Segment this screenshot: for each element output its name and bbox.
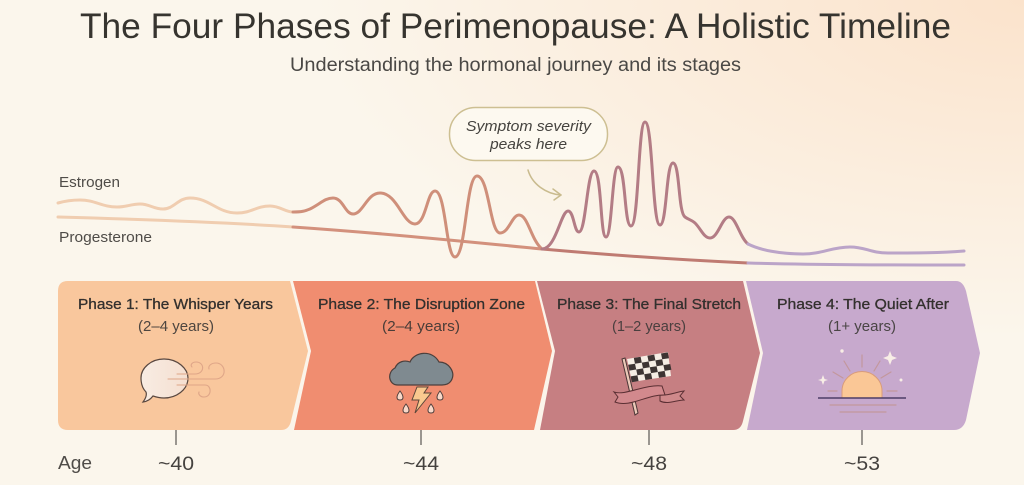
icon: speech bubble with wind [141,359,224,402]
callout: peaks here [489,137,567,153]
panel: phase 4 [700,281,980,430]
label: Estrogen: Estrogen [59,175,120,191]
duration: phase 2: (2–4 years) [382,319,460,335]
duration: phase 1: (2–4 years) [138,319,214,335]
age marker: 40 [158,430,194,475]
estrogen line [58,122,964,257]
icon: sunrise [818,349,906,412]
icon: checkered flag [614,352,684,415]
age marker: 40: ~40 [158,453,194,475]
label: Progesterone: Progesterone [59,230,152,246]
panel: phase 1 [58,281,311,430]
heading: phase 1: Phase 1: The Whisper Years [78,296,273,313]
age axis [58,430,880,475]
duration: phase 3: (1–2 years) [612,319,686,335]
title: The Four Phases of Perimenopause: A Holistic Timeline [80,6,951,46]
age marker: 53: ~53 [844,453,880,475]
age marker: 44: ~44 [403,453,439,475]
panel: phase 3 [520,281,763,430]
heading: phase 3: Phase 3: The Final Stretch [557,296,741,313]
age marker: 48: ~48 [631,453,667,475]
label: Age: Age [58,452,92,473]
age marker: 48 [631,430,667,475]
age marker: 44 [403,430,439,475]
duration: phase 4: (1+ years) [828,319,896,335]
icon: storm cloud [390,353,453,413]
heading: phase 2: Phase 2: The Disruption Zone [318,296,525,313]
arrow: callout to peak [528,170,561,200]
panel: phase 2 [280,281,555,430]
progesterone line [58,217,964,265]
hormone chart [58,122,964,265]
age marker: 53 [844,430,880,475]
heading: phase 4: Phase 4: The Quiet After [777,296,949,313]
callout: Symptom severity [466,119,592,135]
callout [450,108,608,160]
subtitle: Understanding the hormonal journey and its stages [290,55,741,76]
